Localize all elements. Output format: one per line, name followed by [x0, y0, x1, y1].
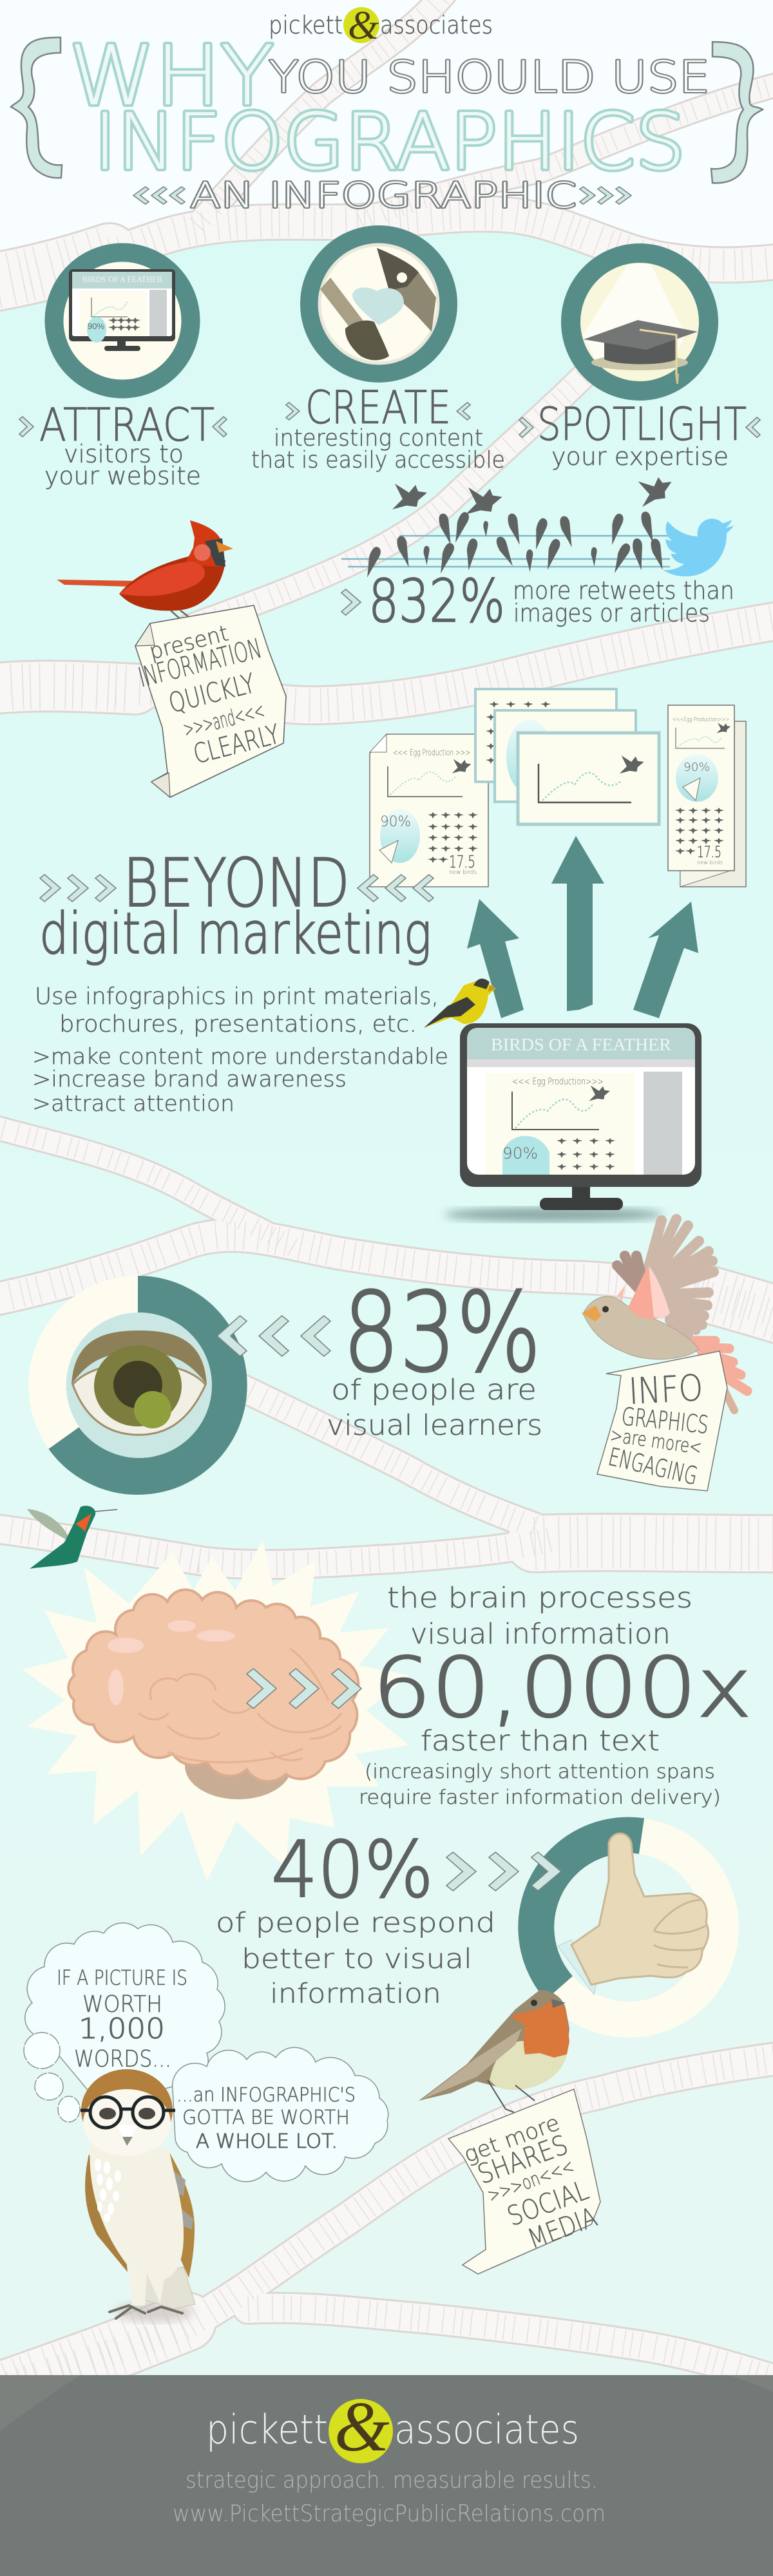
stat: 83% visual learners: visual learners: [327, 1409, 542, 1442]
icon: graduation cap in ring: [571, 253, 709, 391]
heading: create: CREATE: [305, 381, 451, 434]
list: benefits: [32, 1044, 448, 1117]
body: [583, 1296, 699, 1359]
website: www.PickettStrategicPublicRelations.com: [173, 2501, 606, 2527]
stat: 83% visual learners: 83%: [343, 1269, 541, 1397]
speech cloud: A WHOLE LOT.: [196, 2130, 338, 2153]
stat: 832% more retweets: images or articles: [513, 599, 710, 627]
arrow: left: [467, 899, 524, 1018]
wing feathers: [617, 1219, 714, 1334]
heading: beyond digital marketing: [39, 845, 434, 967]
scroll: infographics are more engaging: INFO: [628, 1367, 704, 1413]
text: print materials: brochures, presentations, etc.: [59, 1011, 417, 1037]
stat: 60,000x: require faster information delivery): [359, 1786, 721, 1809]
illustration: barn owl with glasses: [81, 2069, 195, 2322]
text: your expertise: your expertise: [551, 442, 729, 471]
stat: 60,000x: the brain processes: [387, 1582, 692, 1615]
illustration: large monitor: 90%: [502, 1144, 538, 1162]
stat: 40% respond better: of people respond: [216, 1907, 495, 1938]
printed cards: middle stack: [475, 689, 659, 824]
scroll: get more shares on social media: get more: [461, 2110, 563, 2168]
text: interesting content: interesting content: [274, 425, 483, 451]
stat: 60,000x: visual information: [410, 1618, 671, 1651]
stat: 83% visual learners: of people are: [331, 1374, 537, 1406]
tagline: strategic approach. measurable results.: [186, 2467, 598, 2494]
brain: [68, 1589, 358, 1781]
scroll: infographics are more engaging: [597, 1351, 727, 1491]
icon: monitor in ring: BIRDS OF A FEATHER: [82, 274, 162, 284]
panel: attract: [19, 252, 227, 490]
footer logo: pickett: [206, 2406, 328, 2453]
scroll: get more shares on social media: [448, 2089, 602, 2274]
stat: 40% respond better: better to visual: [242, 1943, 472, 1975]
list: benefits: >make content more understandable: [32, 1044, 448, 1070]
head: [81, 2069, 173, 2152]
printed document: left: new birds: [449, 869, 477, 876]
scroll: get more shares on social media: SOCIAL: [503, 2174, 593, 2232]
footer: [0, 2375, 773, 2576]
illustration: hummingbird: [27, 1506, 117, 1569]
scroll: present information quickly and clearly: QUICKLY: [166, 667, 258, 719]
text: visitors to your website: your website: [44, 462, 201, 490]
panel: create: [251, 235, 505, 473]
illustration: pink cardinal: [582, 1219, 747, 1410]
scroll: present information quickly and clearly: CLEARLY: [190, 718, 283, 770]
subtitle: AN INFOGRAPHIC: [190, 175, 577, 216]
footer logo: [206, 2387, 579, 2466]
heading: beyond digital marketing: digital marketing: [39, 900, 432, 967]
panel: spotlight: [519, 253, 760, 471]
stat: 832% more retweets: [341, 567, 734, 636]
body: [90, 2145, 184, 2306]
stat: 40% respond better: information: [270, 1978, 441, 2009]
INFOGRAPHICS: INFOGRAPHICS: [93, 98, 685, 187]
arrow: center: [551, 836, 604, 1011]
icon: thumbs up hand: [558, 1833, 709, 1994]
text: interesting content: that is easily accessible: [251, 447, 505, 473]
scroll: infographics are more engaging: >are more<: [609, 1424, 703, 1459]
footer logo: associates: [394, 2406, 579, 2453]
stat: 60,000x: 60,000x: [372, 1640, 752, 1736]
header logo: &: [348, 4, 379, 48]
right brace: [711, 42, 763, 183]
stat: 832% more retweets: more retweets than: [513, 576, 734, 605]
brain stem: [185, 1732, 292, 1799]
printed brochure: right: 90%: [683, 761, 710, 774]
thought cloud: WORTH: [82, 1991, 162, 2018]
left brace: [11, 37, 62, 178]
text: print materials: Use infographics in print materials,: [35, 983, 439, 1010]
stat: 832% more retweets: 832%: [368, 567, 505, 636]
heading: attract: ATTRACT: [39, 399, 215, 451]
speech cloud: GOTTA BE WORTH: [182, 2107, 350, 2129]
donut chart: thumbs up 40%: [536, 1833, 721, 2020]
eyes: [99, 2108, 116, 2119]
illustration: robin: [419, 1990, 569, 2112]
list: benefits: >increase brand awareness: [32, 1066, 347, 1092]
footer logo: &: [334, 2387, 390, 2466]
stat: 60,000x: [247, 1582, 752, 1809]
chevrons: [286, 402, 470, 420]
illustration: large monitor: <<< Egg Production>>>: [512, 1077, 604, 1087]
printed brochure: right: [668, 705, 746, 887]
printed document: left: 90%: [380, 814, 411, 830]
printed brochure: right: <<<Egg Production>>>: [673, 717, 729, 723]
scroll: present information quickly and clearly: present: [147, 620, 231, 665]
sunburst: [22, 1540, 409, 1881]
text: print materials: [35, 983, 439, 1037]
WHY: WHY: [69, 28, 274, 124]
flying birds: [392, 473, 676, 515]
scroll: get more shares on social media: MEDIA: [524, 2201, 601, 2255]
perched birds: [362, 511, 667, 579]
thought cloud: WORDS...: [74, 2046, 171, 2072]
scroll: infographics are more engaging: ENGAGING: [606, 1443, 700, 1490]
scroll: present information quickly and clearly: >>>and<<<: [181, 698, 267, 743]
text: interesting content: [251, 425, 505, 473]
scroll: infographics are more engaging: GRAPHICS: [620, 1402, 710, 1439]
scroll: get more shares on social media: SHARES: [473, 2128, 572, 2190]
stat: 40% respond better: [216, 1826, 561, 2009]
icon: eye: [72, 1331, 207, 1435]
heading: beyond digital marketing: BEYOND: [123, 845, 350, 922]
subtitle chevrons: [133, 187, 631, 204]
icon: monitor in ring: [54, 252, 191, 389]
arrow: right: [633, 902, 698, 1018]
illustration: goldfinch: [424, 979, 496, 1028]
stat: 40% respond better: 40%: [271, 1826, 434, 1915]
speech cloud: [173, 2047, 388, 2182]
title: [11, 28, 763, 216]
scroll: get more shares on social media: >>>on<<<: [484, 2155, 577, 2207]
branch shadow: [0, 2375, 773, 2431]
stat: 83% visual learners: [217, 1269, 542, 1442]
header logo: pickett: [269, 11, 343, 39]
illustration: large monitor: [444, 1023, 701, 1222]
YOU SHOULD USE: YOU SHOULD USE: [269, 52, 710, 103]
printed document: left: 17.5: [449, 853, 475, 872]
chevrons: [19, 417, 227, 437]
scroll: present information quickly and clearly: [131, 605, 286, 797]
chevrons: [519, 417, 760, 437]
printed document: left: <<< Egg Production >>>: [393, 748, 470, 758]
thought cloud: [24, 1923, 225, 2122]
wires: [341, 536, 670, 567]
thought cloud: 1,000: [79, 2012, 165, 2045]
left wing: [85, 2154, 128, 2272]
glasses: [81, 2097, 175, 2128]
tail: [692, 1341, 747, 1410]
illustration: large monitor: BIRDS OF A FEATHER: [491, 1035, 671, 1054]
birds on wires with twitter: [341, 473, 734, 579]
printed brochure: right: 17.5: [697, 843, 721, 861]
printed brochure: right: new birds: [697, 860, 723, 866]
feet: [110, 2306, 182, 2318]
illustration: cardinal: [57, 520, 233, 622]
brain highlights and folds: [108, 1620, 341, 1762]
text: visitors to your website: visitors to: [64, 440, 184, 468]
printed document: left: [370, 734, 488, 887]
tail: [138, 2267, 195, 2309]
illustration: sunburst and brain: [22, 1540, 409, 1881]
icon: pen and brush in ring: [310, 235, 448, 373]
stat: 60,000x: (increasingly short attention spans: [365, 1761, 715, 1783]
icon: twitter bird: [663, 518, 734, 576]
stat: 60,000x: faster than text: [421, 1725, 660, 1757]
right wing: [167, 2149, 195, 2278]
thought cloud: IF A PICTURE IS: [57, 1965, 187, 1990]
text: visitors to your website: [44, 440, 201, 490]
speech cloud: ...an INFOGRAPHIC'S: [177, 2084, 356, 2107]
header logo: associates: [380, 11, 493, 39]
scroll: present information quickly and clearly: INFORMATION: [135, 632, 265, 694]
donut chart: eye 83%: [47, 1294, 229, 1476]
icon: monitor in ring: 90%: [88, 321, 104, 331]
list: benefits: >attract attention: [32, 1091, 234, 1117]
header logo: [269, 4, 493, 48]
breast spots: [95, 2159, 121, 2222]
